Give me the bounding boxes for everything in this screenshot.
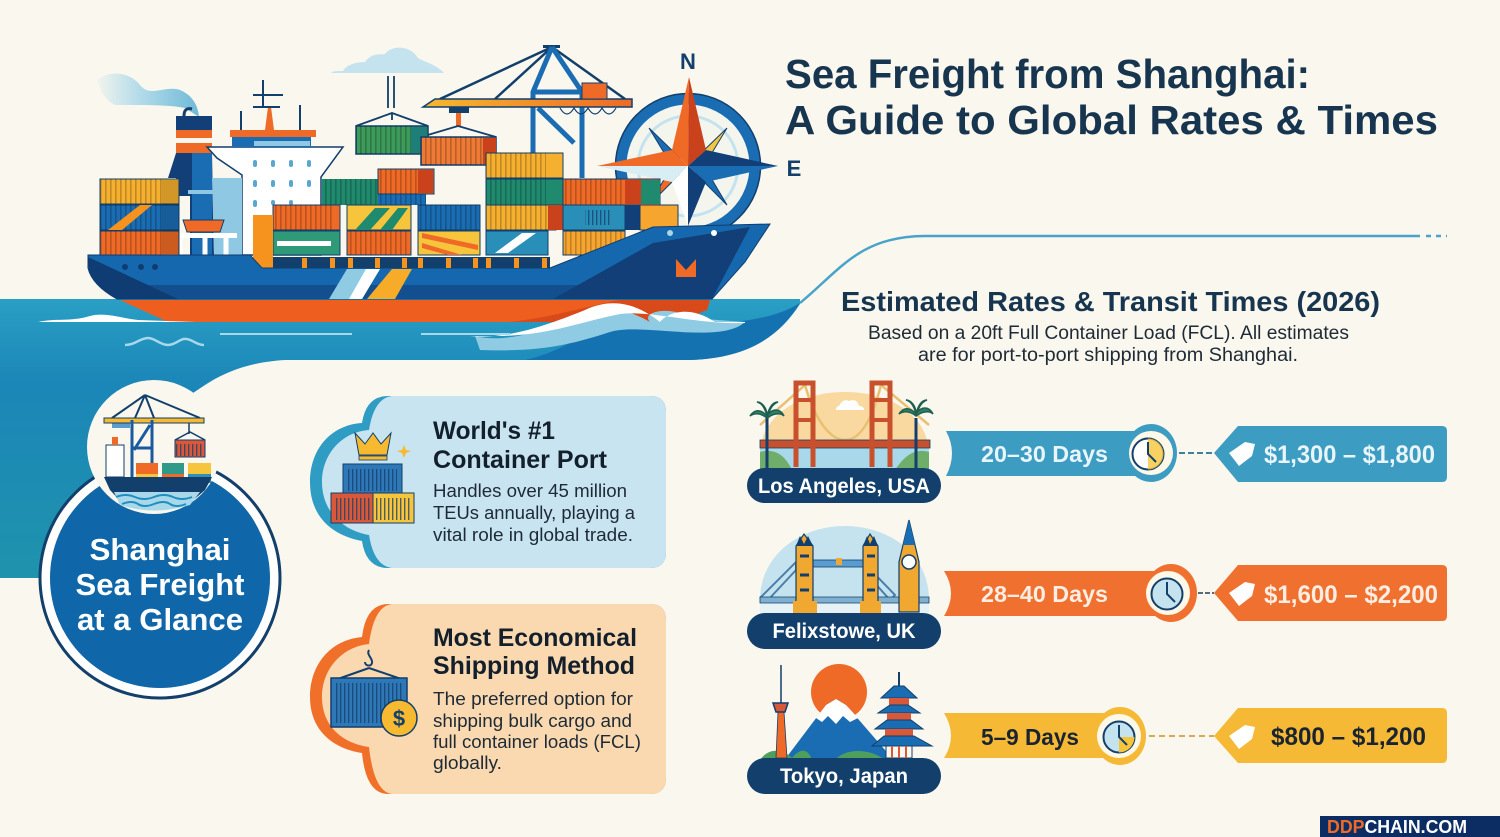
badge heading [76, 532, 244, 637]
cloud [331, 48, 444, 73]
smoke plume [97, 74, 199, 117]
hanging green container [356, 126, 428, 154]
card body text [433, 689, 641, 773]
section description: Based on a 20ft Full Container Load (FCL). All estimates [868, 323, 1349, 344]
route line from sea to the rates section [800, 236, 1447, 303]
card heading [433, 417, 608, 474]
card body text: globally. [433, 753, 502, 773]
ship hull [88, 224, 770, 322]
card heading: Container Port [433, 446, 608, 474]
section description [868, 323, 1349, 366]
panel: most economical shipping method [310, 604, 666, 794]
transit time banner [944, 713, 1110, 758]
badge: Shanghai sea freight at a glance [40, 380, 280, 698]
ship superstructure [168, 80, 343, 255]
city label [747, 613, 941, 649]
price: $1,600 – $2,200 [1264, 581, 1438, 609]
city label: Tokyo, Japan [780, 765, 908, 788]
transit time banner [946, 431, 1140, 476]
icon: container on hook with dollar coin [331, 650, 417, 736]
connector [1149, 735, 1214, 737]
city label [747, 468, 941, 503]
icon: clock [1145, 564, 1197, 622]
icon: price label [1229, 442, 1255, 466]
route: Felixstowe [747, 520, 1447, 649]
connector [1179, 452, 1214, 454]
card body text: TEUs annually, playing a [433, 503, 636, 523]
section heading: Estimated Rates & Transit Times (2026) [841, 286, 1380, 317]
compass letter E: E [787, 156, 801, 181]
hanging orange container [421, 137, 496, 165]
icon: port crane and ship [87, 380, 221, 514]
transit time label: 20–30 Days [981, 441, 1108, 467]
price: $800 – $1,200 [1271, 723, 1426, 751]
badge heading: at a Glance [77, 602, 243, 637]
badge heading: Shanghai [90, 532, 231, 567]
city label: Felixstowe, UK [772, 620, 916, 643]
city label [747, 758, 941, 794]
title [785, 51, 1438, 143]
card heading [433, 624, 637, 680]
card heading: Most Economical [433, 624, 637, 652]
container stack: left block [100, 179, 179, 255]
title: Sea Freight from Shanghai: [785, 51, 1310, 97]
dockside crane [423, 45, 632, 178]
compass rose [597, 77, 778, 238]
card heading: Shipping Method [433, 652, 635, 680]
city label: Los Angeles, USA [758, 475, 930, 498]
panel: world's number one container port [310, 396, 666, 568]
hanging cargo hook and cable [356, 76, 496, 137]
card body text: Handles over 45 million [433, 481, 627, 501]
icon: Tower Bridge and Big Ben [760, 520, 929, 615]
icon: Mount Fuji, tower and pagoda [760, 664, 932, 760]
price tag [1214, 565, 1447, 621]
card body text [433, 481, 636, 545]
connector [1198, 592, 1214, 594]
watermark: DDPCHAIN.COM [1327, 817, 1467, 837]
container stack: main block [253, 153, 678, 268]
price tag [1214, 708, 1447, 763]
sea band sweeping down the left edge [0, 299, 800, 578]
illustration: container ship [38, 45, 800, 360]
icon: crown on containers [331, 433, 414, 523]
icon: container on hook with dollar coin: $ [393, 706, 405, 731]
transit time banner [944, 571, 1160, 616]
compass letter N: N [680, 49, 696, 74]
transit time label: 5–9 Days [981, 724, 1079, 750]
card heading: World's #1 [433, 417, 555, 445]
icon: price label [1229, 725, 1255, 749]
card body text: full container loads (FCL) [433, 732, 641, 752]
price tag [1214, 426, 1447, 482]
waves and foam [38, 303, 800, 360]
transit time label: 28–40 Days [981, 581, 1108, 607]
card body text: vital role in global trade. [433, 525, 633, 545]
route: Tokyo [747, 664, 1447, 794]
icon: clock [1125, 424, 1177, 482]
icon: clock [1094, 707, 1146, 765]
price: $1,300 – $1,800 [1264, 441, 1435, 469]
route: Los Angeles [747, 383, 1447, 503]
title: A Guide to Global Rates & Times [785, 97, 1438, 143]
section description: are for port-to-port shipping from Shanghai. [918, 345, 1298, 366]
icon: price label [1229, 582, 1255, 606]
icon: Golden Gate bridge [750, 383, 933, 470]
card body text: shipping bulk cargo and [433, 711, 632, 731]
badge heading: Sea Freight [76, 567, 244, 602]
card body text: The preferred option for [433, 689, 633, 709]
